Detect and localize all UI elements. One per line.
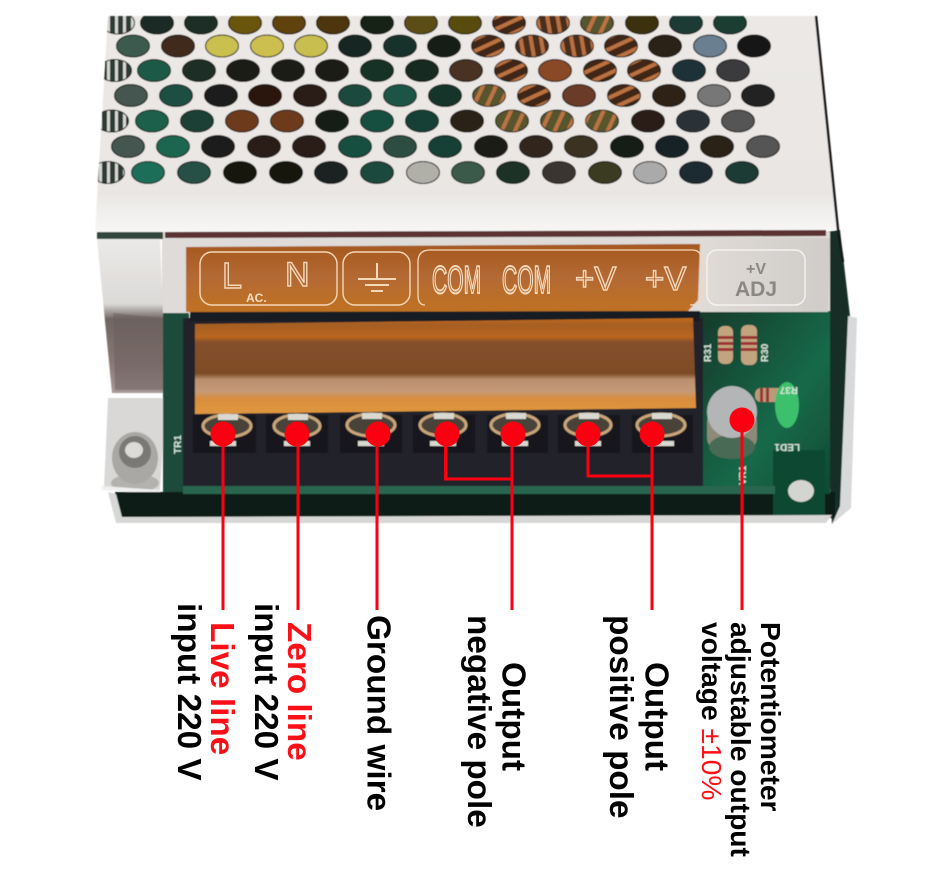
perforated metal lid — [92, 12, 843, 262]
silk labels: R37 — [779, 384, 798, 395]
left corner seam — [97, 232, 163, 239]
label: potentiometer: voltage ±10% — [696, 622, 728, 800]
resistors — [718, 325, 789, 402]
output negative connector — [434, 422, 526, 610]
tab reflection — [113, 313, 166, 390]
screw washers — [210, 413, 674, 446]
output positive connector — [576, 422, 664, 610]
silk labels — [703, 343, 800, 485]
silk labels: LED1 — [774, 441, 800, 452]
terminal slots — [193, 415, 693, 453]
ventilation holes — [92, 12, 780, 184]
front metal face — [162, 232, 830, 314]
label: output positive pole: Output — [638, 662, 674, 771]
ground connector — [366, 422, 390, 610]
label: output negative pole: Output — [494, 662, 532, 771]
+V ADJ box — [707, 250, 805, 305]
L N AC box: AC. — [246, 291, 267, 305]
silk labels: R31 — [703, 343, 714, 362]
label: zero line: input 220 V — [247, 603, 284, 781]
side wall of chassis — [820, 230, 850, 524]
label: zero line: Zero line — [280, 622, 317, 761]
silk label TR1: TR1 — [173, 435, 184, 454]
mounting screw — [111, 432, 159, 518]
label: zero line — [247, 603, 317, 781]
bracket lip — [102, 486, 160, 494]
terminal screws — [203, 414, 685, 437]
label: live line: input 220 V — [170, 603, 207, 781]
label: potentiometer: Potentiometer — [755, 622, 787, 812]
L N AC box: L — [222, 255, 242, 296]
lid right edge line — [816, 16, 843, 262]
silk labels: VR1 — [738, 465, 749, 485]
label: live line — [170, 603, 240, 781]
label: output negative pole — [460, 615, 532, 828]
lower right board — [773, 450, 825, 515]
circuit board left strip — [163, 313, 189, 493]
label: live line: Live line — [203, 622, 240, 755]
green LED — [775, 382, 799, 428]
right circuit board — [700, 311, 830, 515]
ground symbol box — [343, 252, 410, 305]
label: ground wire: Ground wire — [360, 615, 396, 811]
potentiometer connector — [730, 408, 754, 610]
silver ADJ plate — [700, 238, 830, 312]
right metal edge — [832, 316, 857, 524]
dark seam under lid — [165, 230, 826, 238]
label: output positive pole: positive pole — [602, 615, 639, 819]
label: output positive pole — [602, 615, 674, 819]
COM and +V box: COM — [432, 258, 481, 302]
L N AC box — [200, 252, 337, 305]
live line connector — [210, 422, 236, 610]
rotated labels — [170, 603, 787, 858]
silk labels: R30 — [760, 343, 771, 362]
COM and +V box: +V — [645, 260, 686, 297]
COM and +V box: +V — [575, 260, 616, 297]
lower mounting bracket — [104, 398, 166, 490]
L N AC box: N — [285, 256, 310, 294]
lower board and base — [115, 492, 835, 518]
red connector lines and dots — [210, 408, 754, 610]
orange label strip — [186, 244, 700, 312]
terminal block — [183, 318, 775, 494]
label: potentiometer — [696, 622, 787, 858]
dark gap behind cover — [190, 311, 700, 321]
label: output negative pole: negative pole — [460, 615, 497, 828]
+V ADJ box: +V — [746, 261, 766, 278]
zero line connector — [284, 422, 310, 610]
embossed labels — [200, 250, 805, 305]
lower board edge — [183, 486, 775, 494]
label: potentiometer: adjustable output — [725, 622, 757, 858]
orange transparent cover — [195, 318, 696, 414]
COM and +V box — [418, 250, 702, 305]
mounting hole — [788, 480, 814, 502]
power supply photo — [92, 12, 857, 524]
COM and +V box: COM — [502, 258, 551, 302]
base rail — [108, 492, 832, 523]
potentiometer — [707, 386, 757, 459]
left silver tab — [97, 239, 166, 393]
+V ADJ box: ADJ — [735, 278, 777, 301]
